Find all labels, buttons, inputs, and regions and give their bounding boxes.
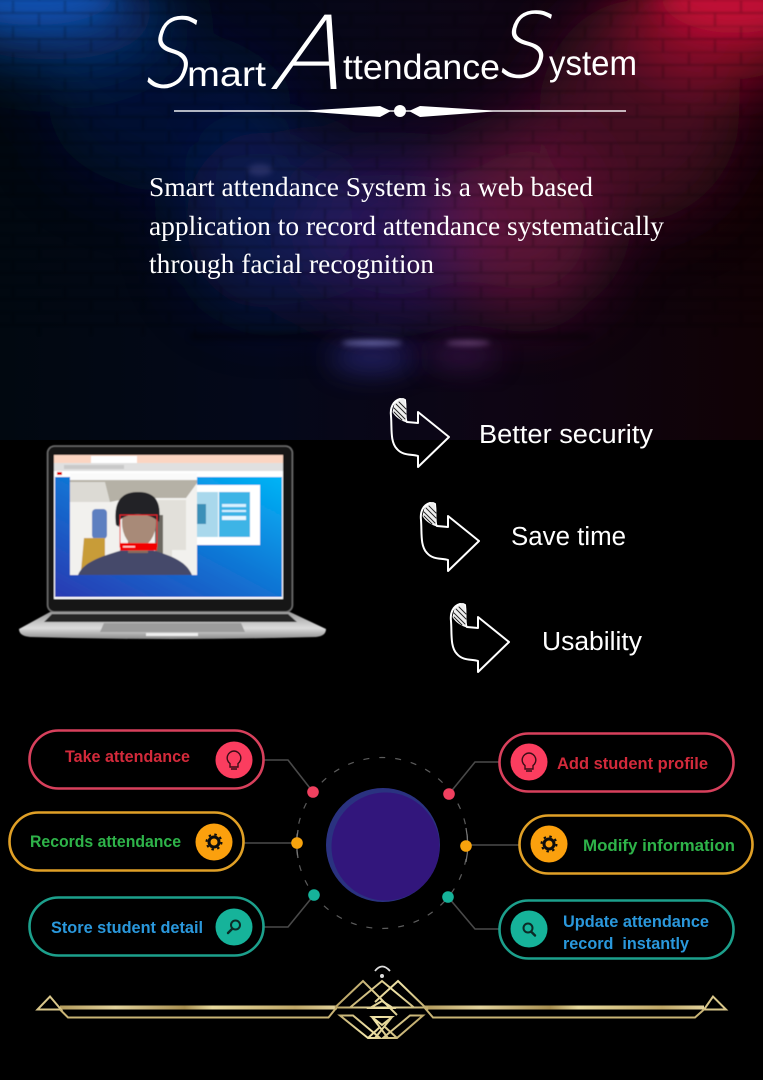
intro paragraph (149, 172, 665, 279)
title divider ornament (174, 105, 626, 117)
pill: add student profile: Add student profile (557, 754, 708, 773)
title: ttendance (343, 48, 500, 87)
title: S (133, 0, 211, 110)
pill: store student detail (30, 898, 264, 956)
intro paragraph: through facial recognition (149, 249, 435, 279)
laptop with face recognition screenshot (19, 446, 326, 639)
brick wall hero background (0, 0, 763, 440)
gold art-deco ornament (38, 981, 726, 1038)
pill: update attendance record instantly: record instantly (563, 934, 690, 953)
title: ystem (549, 44, 637, 83)
title (133, 0, 637, 113)
pill: take attendance: Take attendance (65, 747, 190, 766)
pill: records attendance (10, 812, 244, 870)
pill: modify information (520, 816, 752, 874)
pill: take attendance (30, 730, 264, 788)
intro paragraph: application to record attendance systematically (149, 211, 665, 241)
title: mart (187, 55, 266, 94)
central hub diagram (244, 758, 519, 929)
pill: store student detail: Store student detail (51, 918, 203, 937)
pill: add student profile (500, 734, 734, 792)
webcam window (70, 473, 197, 575)
feature label: save time: Save time (511, 523, 626, 551)
pill: records attendance: Records attendance (30, 832, 181, 851)
pill: update attendance record instantly: Update attendance (563, 912, 709, 931)
pill: update attendance record instantly (500, 900, 734, 958)
feature label: usability: Usability (542, 628, 642, 656)
arrow icon: save time (421, 503, 479, 571)
arrow icon: better security (391, 399, 449, 467)
feature label: better security: Better security (479, 421, 653, 449)
small ornament finial (375, 966, 390, 978)
pill: modify information: Modify information (583, 836, 735, 855)
laptop base (19, 612, 326, 639)
intro paragraph: Smart attendance System is a web based (149, 172, 593, 202)
arrow icon: usability (451, 604, 509, 672)
